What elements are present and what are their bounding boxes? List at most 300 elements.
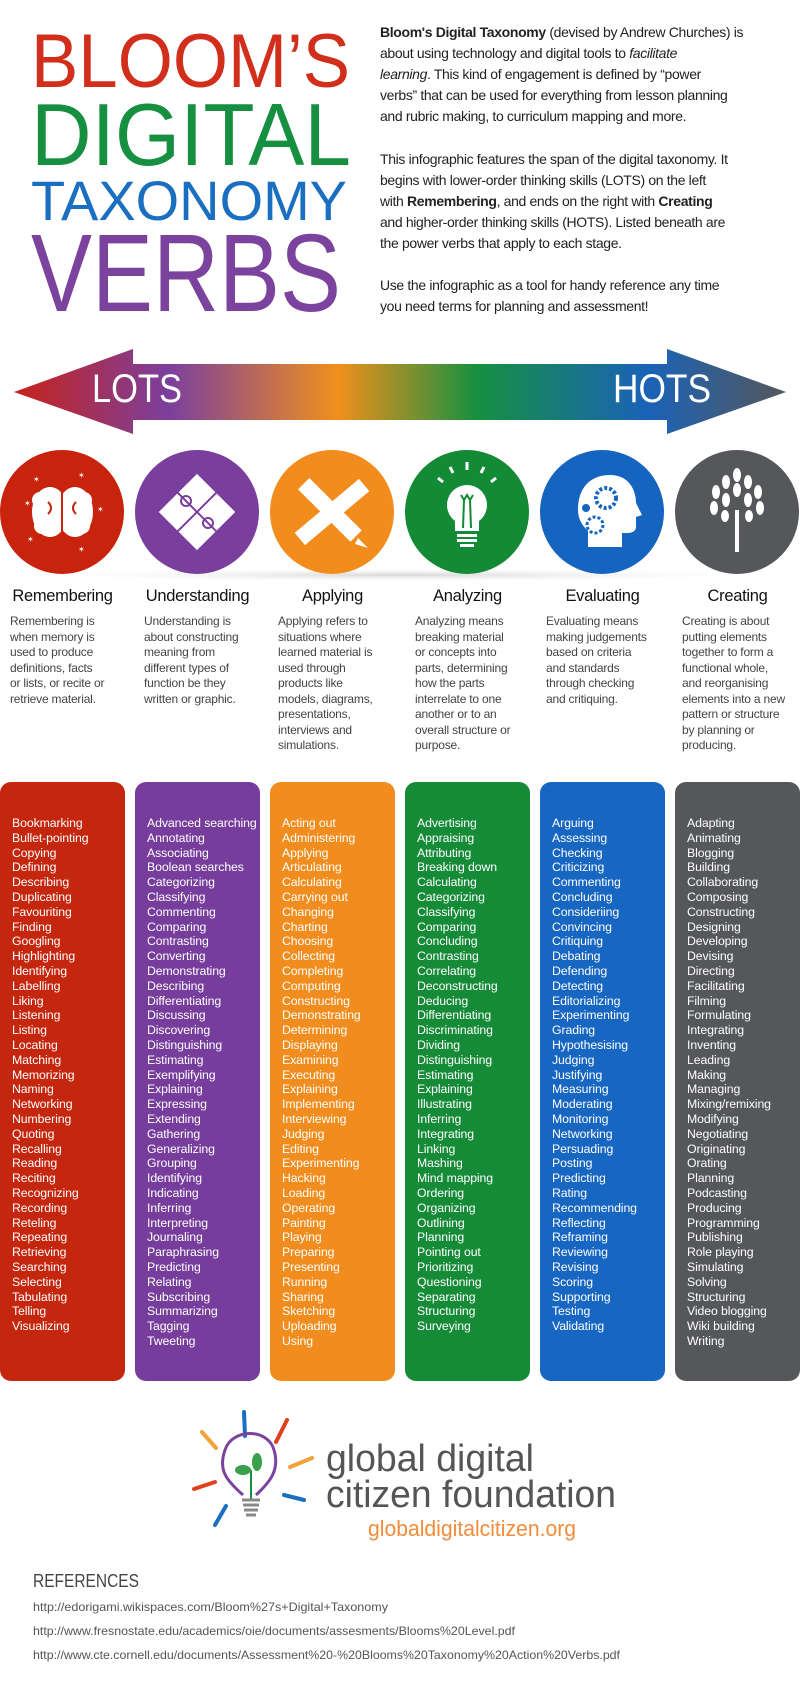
verb list: Analyzing: Appraising	[417, 831, 474, 845]
verb list: Remembering: Recognizing	[12, 1186, 79, 1200]
description: Creating: pattern or structure	[682, 707, 779, 721]
verb list: Creating: Programming	[687, 1216, 760, 1230]
verb list: Analyzing: Inferring	[417, 1112, 461, 1126]
description: Evaluating	[546, 614, 647, 706]
verb list: Creating: Devising	[687, 949, 733, 963]
verb list: Applying: Choosing	[282, 934, 333, 948]
verb list: Understanding: Associating	[147, 846, 209, 860]
intro text paragraph 2: with Remembering, and ends on the right with Creating	[380, 193, 712, 209]
verb list: Creating: Building	[687, 860, 730, 874]
verb list: Understanding: Subscribing	[147, 1290, 210, 1304]
description: Understanding: meaning from	[144, 645, 215, 659]
verb list: Analyzing: Deconstructing	[417, 979, 498, 993]
verb list: Creating: Developing	[687, 934, 748, 948]
verb list: Evaluating: Reframing	[552, 1230, 608, 1244]
verb list: Understanding: Demonstrating	[147, 964, 226, 978]
icon: tree	[675, 450, 799, 574]
description: Understanding	[144, 614, 238, 706]
verb list: Creating: Leading	[687, 1053, 730, 1067]
description: Evaluating: based on criteria	[546, 645, 631, 659]
verb list: Evaluating: Critiquing	[552, 934, 603, 948]
verb list: Remembering: Identifying	[12, 964, 67, 978]
verb list: Remembering: Reading	[12, 1156, 57, 1170]
description: Creating: elements into a new	[682, 692, 785, 706]
verb list: Evaluating: Testing	[552, 1304, 590, 1318]
verb list: Evaluating: Moderating	[552, 1097, 613, 1111]
verb list: Applying: Calculating	[282, 875, 342, 889]
description: Creating: Creating is about	[682, 614, 769, 628]
verb list: Applying: Executing	[282, 1068, 335, 1082]
verb list: Creating: Designing	[687, 920, 741, 934]
verb list: Applying: Applying	[282, 846, 328, 860]
description: Evaluating: and critiquing.	[546, 692, 618, 706]
verb list: Analyzing: Attributing	[417, 846, 471, 860]
verb list: Creating: Modifying	[687, 1112, 739, 1126]
verb list: Understanding	[135, 782, 260, 1381]
description: Applying	[278, 614, 373, 752]
verb list: Evaluating: Criticizing	[552, 860, 604, 874]
icon: pencil and ruler	[270, 450, 394, 574]
icon: brain: ✶	[33, 475, 40, 484]
verb list: Understanding: Generalizing	[147, 1142, 215, 1156]
verb list: Creating: Negotiating	[687, 1127, 748, 1141]
verb list: Creating: Podcasting	[687, 1186, 747, 1200]
verb list: Creating: Making	[687, 1068, 726, 1082]
verb list: Remembering: Visualizing	[12, 1319, 69, 1333]
description: Applying: simulations.	[278, 738, 339, 752]
verb list: Understanding: Tagging	[147, 1319, 189, 1333]
description: Remembering: definitions, facts	[10, 660, 92, 674]
verb list: Evaluating: Debating	[552, 949, 600, 963]
heading: Evaluating: Evaluating	[565, 587, 640, 605]
verb list: Analyzing: Discriminating	[417, 1023, 493, 1037]
description: Analyzing: breaking material	[415, 630, 504, 644]
verb list: Creating: Blogging	[687, 846, 734, 860]
icon: brain	[0, 450, 124, 574]
verb list: Creating: Producing	[687, 1201, 741, 1215]
arrow: LOTS to HOTS	[14, 349, 786, 434]
verb list: Creating: Filming	[687, 994, 726, 1008]
verb list: Applying: Determining	[282, 1023, 347, 1037]
verb list: Analyzing: Surveying	[417, 1319, 471, 1333]
verb list: Creating: Managing	[687, 1082, 740, 1096]
description: Analyzing: another or to an	[415, 707, 497, 721]
verb list: Evaluating: Consideriing	[552, 905, 619, 919]
verb list: Evaluating: Convincing	[552, 920, 612, 934]
verb list: Creating: Wiki building	[687, 1319, 755, 1333]
description: Analyzing: how the parts	[415, 676, 484, 690]
logo: global digital citizen foundation: global digital	[326, 1438, 534, 1480]
verb list: Understanding: Predicting	[147, 1260, 201, 1274]
description: Remembering	[10, 614, 104, 706]
verb list: Applying: Experimenting	[282, 1156, 359, 1170]
verb list: Applying: Uploading	[282, 1319, 336, 1333]
intro text paragraph 2: and higher-order thinking skills (HOTS). Listed beneath are	[380, 214, 725, 230]
verb list: Evaluating: Checking	[552, 846, 602, 860]
description: Applying: interviews and	[278, 722, 352, 736]
description: Analyzing	[415, 614, 510, 752]
heading: Creating: Creating	[708, 587, 767, 605]
verb list: Analyzing: Breaking down	[417, 860, 497, 874]
verb list: Analyzing: Questioning	[417, 1275, 482, 1289]
verb list: Understanding: Extending	[147, 1112, 201, 1126]
verb list: Applying: Using	[282, 1334, 313, 1348]
verb list: Analyzing: Distinguishing	[417, 1053, 492, 1067]
verb list: Evaluating: Posting	[552, 1156, 592, 1170]
verb list: Understanding: Contrasting	[147, 934, 209, 948]
verb list: Evaluating: Assessing	[552, 831, 607, 845]
verb list: Applying: Interviewing	[282, 1112, 346, 1126]
verb list: Creating: Collaborating	[687, 875, 758, 889]
intro text paragraph 2: begins with lower-order thinking skills (LOTS) on the left	[380, 172, 706, 188]
verb list: Creating: Mixing/remixing	[687, 1097, 771, 1111]
intro text paragraph 1: about using technology and digital tools to facilitate	[380, 45, 677, 61]
verb list: Evaluating: Recommending	[552, 1201, 637, 1215]
intro text paragraph 1: and rubric making, to curriculum mapping and more.	[380, 108, 686, 124]
references	[33, 1571, 621, 1662]
verb list: Analyzing: Estimating	[417, 1068, 473, 1082]
verb list: Analyzing: Linking	[417, 1142, 455, 1156]
heading: Applying: Applying	[302, 587, 363, 605]
verb list: Remembering: Listening	[12, 1008, 60, 1022]
verb list: Creating: Simulating	[687, 1260, 743, 1274]
verb list: Understanding: Summarizing	[147, 1304, 218, 1318]
verb list: Understanding: Boolean searches	[147, 860, 244, 874]
verb list: Analyzing: Advertising	[417, 816, 477, 830]
intro text paragraph 3: Use the infographic as a tool for handy reference any time	[380, 277, 719, 293]
verb list: Creating: Integrating	[687, 1023, 744, 1037]
verb list: Analyzing: Calculating	[417, 875, 477, 889]
verb list: Applying: Preparing	[282, 1245, 334, 1259]
verb list: Remembering: Reciting	[12, 1171, 56, 1185]
verb list: Analyzing: Correlating	[417, 964, 476, 978]
verb list: Analyzing: Mind mapping	[417, 1171, 493, 1185]
verb list: Remembering: Matching	[12, 1053, 61, 1067]
icon: light bulb with sprout	[194, 1412, 312, 1525]
intro text paragraph 1: verbs” that can be used for everything from lesson planning	[380, 87, 727, 103]
verb list: Remembering: Networking	[12, 1097, 73, 1111]
heading: Analyzing: Analyzing	[433, 587, 502, 605]
verb list: Analyzing: Concluding	[417, 934, 478, 948]
arrow: LOTS to HOTS: LOTS	[92, 367, 182, 411]
description: Creating: producing.	[682, 738, 736, 752]
verb list: Understanding: Paraphrasing	[147, 1245, 219, 1259]
verb list: Understanding: Grouping	[147, 1156, 197, 1170]
verb list: Evaluating: Grading	[552, 1023, 595, 1037]
verb list: Applying: Loading	[282, 1186, 325, 1200]
intro text paragraph 1: Bloom's Digital Taxonomy (devised by Andrew Churches) is	[380, 24, 743, 40]
verb list: Analyzing: Deducing	[417, 994, 468, 1008]
verb list: Applying: Carrying out	[282, 890, 348, 904]
verb list: Creating: Composing	[687, 890, 748, 904]
description: Applying: used through	[278, 660, 346, 674]
verb list: Analyzing: Organizing	[417, 1201, 475, 1215]
verb list: Remembering: Favouriting	[12, 905, 72, 919]
verb list: Understanding: Interpreting	[147, 1216, 208, 1230]
description: Creating	[682, 614, 786, 752]
verb list: Analyzing: Categorizing	[417, 890, 485, 904]
verb list: Analyzing: Ordering	[417, 1186, 464, 1200]
icon: brain: ✶	[27, 535, 34, 544]
verb list: Creating: Originating	[687, 1142, 745, 1156]
description: Analyzing: purpose.	[415, 738, 460, 752]
verb list: Evaluating: Commenting	[552, 875, 621, 889]
references: http://www.fresnostate.edu/academics/oie/documents/assesments/Blooms%20Level.pdf	[33, 1624, 516, 1638]
verb list: Evaluating: Networking	[552, 1127, 613, 1141]
intro text paragraph 1: learning. This kind of engagement is defined by “power	[380, 66, 701, 82]
verb list: Creating: Directing	[687, 964, 735, 978]
verb list: Remembering: Naming	[12, 1082, 54, 1096]
verb list: Applying: Demonstrating	[282, 1008, 361, 1022]
verb list: Applying: Computing	[282, 979, 341, 993]
verb list: Remembering: Numbering	[12, 1112, 71, 1126]
icon: brain: ✶	[97, 505, 104, 514]
verb list: Applying: Operating	[282, 1201, 335, 1215]
verb list: Creating: Planning	[687, 1171, 734, 1185]
verb list: Understanding: Gathering	[147, 1127, 200, 1141]
title: BLOOM’S	[31, 19, 350, 104]
verb list: Understanding: Estimating	[147, 1053, 203, 1067]
verb list: Creating: Orating	[687, 1156, 727, 1170]
verb list: Remembering: Liking	[12, 994, 44, 1008]
description: Creating: together to form a	[682, 645, 773, 659]
verb list: Evaluating: Validating	[552, 1319, 604, 1333]
title: TAXONOMY	[31, 169, 347, 232]
verb list: Applying: Sketching	[282, 1304, 335, 1318]
description: Analyzing: parts, determining	[415, 660, 507, 674]
verb list: Applying: Playing	[282, 1230, 322, 1244]
references: http://www.cte.cornell.edu/documents/Assessment%20-%20Blooms%20Taxonomy%20Action%20Verbs.pdf	[33, 1648, 621, 1662]
verb list: Evaluating	[540, 782, 665, 1381]
arrow: LOTS to HOTS: HOTS	[613, 367, 711, 411]
verb list: Analyzing: Separating	[417, 1290, 475, 1304]
verb list: Analyzing: Dividing	[417, 1038, 460, 1052]
description: Evaluating: making judgements	[546, 630, 647, 644]
verb list: Creating: Facilitating	[687, 979, 745, 993]
verb list: Understanding: Commenting	[147, 905, 216, 919]
verb list: Applying: Judging	[282, 1127, 324, 1141]
description: Creating: and reorganising	[682, 676, 768, 690]
description: Applying: models, diagrams,	[278, 692, 373, 706]
verb list: Remembering: Recording	[12, 1201, 67, 1215]
verb list: Creating: Publishing	[687, 1230, 743, 1244]
verb list: Applying: Constructing	[282, 994, 350, 1008]
verb list: Understanding: Differentiating	[147, 994, 221, 1008]
verb list: Creating: Video blogging	[687, 1304, 767, 1318]
description: Remembering: retrieve material.	[10, 692, 96, 706]
verb list: Creating: Solving	[687, 1275, 727, 1289]
verb list: Analyzing: Contrasting	[417, 949, 479, 963]
verb list: Applying: Completing	[282, 964, 343, 978]
verb list: Remembering: Bookmarking	[12, 816, 83, 830]
verb list: Remembering: Repeating	[12, 1230, 67, 1244]
verb list: Evaluating: Experimenting	[552, 1008, 629, 1022]
verb list: Remembering: Defining	[12, 860, 56, 874]
verb list: Evaluating: Monitoring	[552, 1112, 608, 1126]
verb list: Remembering: Selecting	[12, 1275, 62, 1289]
icon: brain: ✶	[24, 499, 31, 508]
description: Remembering: used to produce	[10, 645, 93, 659]
references: REFERENCES	[33, 1571, 139, 1591]
description: Creating: by planning or	[682, 722, 755, 736]
intro text paragraph 2: the power verbs that apply to each stage.	[380, 235, 622, 251]
verb list: Analyzing: Illustrating	[417, 1097, 472, 1111]
description: Understanding: function be they	[144, 676, 226, 690]
references: http://edorigami.wikispaces.com/Bloom%27s+Digital+Taxonomy	[33, 1600, 388, 1614]
description: Understanding: written or graphic.	[144, 692, 236, 706]
verb list: Applying: Presenting	[282, 1260, 340, 1274]
verb list: Analyzing: Mashing	[417, 1156, 463, 1170]
verb list: Remembering: Listing	[12, 1023, 47, 1037]
verb list: Applying: Hacking	[282, 1171, 326, 1185]
verb list: Applying: Painting	[282, 1216, 326, 1230]
description: Remembering: or lists, or recite or	[10, 676, 104, 690]
intro text paragraph 3: you need terms for planning and assessment!	[380, 298, 648, 314]
verb list: Remembering: Retrieving	[12, 1245, 66, 1259]
verb list: Remembering: Googling	[12, 934, 60, 948]
intro text paragraph 2	[380, 151, 728, 251]
verb list: Understanding: Distinguishing	[147, 1038, 222, 1052]
verb list: Remembering	[0, 782, 125, 1381]
verb list: Remembering: Duplicating	[12, 890, 72, 904]
verb list: Creating: Writing	[687, 1334, 724, 1348]
verb list: Evaluating: Judging	[552, 1053, 594, 1067]
verb list: Understanding: Inferring	[147, 1201, 191, 1215]
verb list: Understanding: Exemplifying	[147, 1068, 216, 1082]
verb list: Evaluating: Hypothesising	[552, 1038, 628, 1052]
logo: global digital citizen foundation	[192, 1410, 616, 1541]
description: Understanding: Understanding is	[144, 614, 231, 628]
verb list: Applying: Editing	[282, 1142, 319, 1156]
verb list: Creating: Structuring	[687, 1290, 745, 1304]
description: Applying: products like	[278, 676, 343, 690]
verb list: Evaluating: Reviewing	[552, 1245, 608, 1259]
verb list: Analyzing: Planning	[417, 1230, 464, 1244]
verb list: Analyzing: Differentiating	[417, 1008, 491, 1022]
icon: brain: ✶	[78, 471, 85, 480]
verb list: Remembering: Describing	[12, 875, 69, 889]
description: Evaluating: through checking	[546, 676, 634, 690]
verb list: Evaluating: Editorializing	[552, 994, 620, 1008]
icon: head with gears	[540, 450, 664, 574]
description: Evaluating: Evaluating means	[546, 614, 638, 628]
verb list: Remembering: Reteling	[12, 1216, 56, 1230]
verb list: Applying: Sharing	[282, 1290, 324, 1304]
verb list: Understanding: Discovering	[147, 1023, 210, 1037]
verb list: Analyzing: Structuring	[417, 1304, 475, 1318]
description: Evaluating: and standards	[546, 660, 619, 674]
verb list: Applying: Administering	[282, 831, 355, 845]
verb list: Analyzing: Prioritizing	[417, 1260, 473, 1274]
verb list: Remembering: Locating	[12, 1038, 58, 1052]
verb list: Understanding: Relating	[147, 1275, 191, 1289]
verb list: Creating: Animating	[687, 831, 741, 845]
verb list: Understanding: Expressing	[147, 1097, 207, 1111]
heading: Remembering: Remembering	[12, 587, 113, 605]
verb list: Remembering: Telling	[12, 1304, 46, 1318]
title: DIGITAL	[31, 85, 351, 184]
verb list: Evaluating: Rating	[552, 1186, 587, 1200]
verb list: Creating: Adapting	[687, 816, 735, 830]
heading: Understanding: Understanding	[146, 587, 249, 605]
description: Analyzing: overall structure or	[415, 722, 510, 736]
verb list: Remembering: Labelling	[12, 979, 60, 993]
description: Remembering: Remembering is	[10, 614, 95, 628]
verb list: Understanding: Indicating	[147, 1186, 199, 1200]
logo: global digital citizen foundation: globaldigitalcitizen.org	[368, 1516, 576, 1541]
description: Understanding: different types of	[144, 660, 229, 674]
verb list: Applying: Explaining	[282, 1082, 338, 1096]
description: Creating: putting elements	[682, 630, 767, 644]
title	[31, 19, 351, 330]
verb list: Remembering: Highlighting	[12, 949, 75, 963]
verb list: Analyzing: Pointing out	[417, 1245, 481, 1259]
verb list: Evaluating: Defending	[552, 964, 607, 978]
verb list: Analyzing	[405, 782, 530, 1381]
verb list: Evaluating: Revising	[552, 1260, 598, 1274]
description: Understanding: about constructing	[144, 630, 238, 644]
verb list: Understanding: Explaining	[147, 1082, 203, 1096]
verb list: Understanding: Classifying	[147, 890, 205, 904]
icon: puzzle	[135, 450, 259, 574]
verb list: Analyzing: Explaining	[417, 1082, 473, 1096]
verb list: Understanding: Categorizing	[147, 875, 215, 889]
verb list: Understanding: Annotating	[147, 831, 205, 845]
verb list: Evaluating: Arguing	[552, 816, 594, 830]
verb list: Evaluating: Supporting	[552, 1290, 610, 1304]
verb list: Understanding: Describing	[147, 979, 204, 993]
icon: light bulb	[405, 450, 529, 574]
verb list: Evaluating: Justifying	[552, 1068, 602, 1082]
verb list: Creating: Formulating	[687, 1008, 751, 1022]
verb list: Evaluating: Scoring	[552, 1275, 593, 1289]
verb list: Applying: Examining	[282, 1053, 339, 1067]
verb list: Applying: Running	[282, 1275, 327, 1289]
verb list: Understanding: Converting	[147, 949, 205, 963]
verb list: Remembering: Quoting	[12, 1127, 54, 1141]
description: Creating: functional whole,	[682, 660, 768, 674]
verb list: Remembering: Finding	[12, 920, 52, 934]
verb list: Analyzing: Integrating	[417, 1127, 474, 1141]
description: Analyzing: or concepts into	[415, 645, 497, 659]
verb list: Evaluating: Concluding	[552, 890, 613, 904]
description: Applying: Applying refers to	[278, 614, 368, 628]
verb list: Understanding: Identifying	[147, 1171, 202, 1185]
verb list: Remembering: Tabulating	[12, 1290, 67, 1304]
icon: brain: ✶	[78, 545, 85, 554]
intro text paragraph 2: This infographic features the span of the digital taxonomy. It	[380, 151, 728, 167]
verb list: Understanding: Tweeting	[147, 1334, 195, 1348]
description: Applying: presentations,	[278, 707, 351, 721]
verb list: Remembering: Memorizing	[12, 1068, 75, 1082]
circle icons row	[0, 450, 799, 579]
verb list: Applying: Articulating	[282, 860, 342, 874]
description: Remembering: when memory is	[10, 630, 95, 644]
verb list: Applying	[270, 782, 395, 1381]
verb list: Understanding: Comparing	[147, 920, 206, 934]
verb list: Evaluating: Measuring	[552, 1082, 609, 1096]
description: Analyzing: interrelate to one	[415, 692, 501, 706]
intro text paragraph 3	[380, 277, 719, 314]
verb list: Applying: Implementing	[282, 1097, 355, 1111]
verb list: Evaluating: Predicting	[552, 1171, 606, 1185]
verb list: Applying: Changing	[282, 905, 334, 919]
verb list: Remembering: Copying	[12, 846, 56, 860]
verb list: Remembering: Bullet-pointing	[12, 831, 88, 845]
description: Analyzing: Analyzing means	[415, 614, 503, 628]
verb list: Understanding: Journaling	[147, 1230, 203, 1244]
verb list: Analyzing: Outlining	[417, 1216, 465, 1230]
